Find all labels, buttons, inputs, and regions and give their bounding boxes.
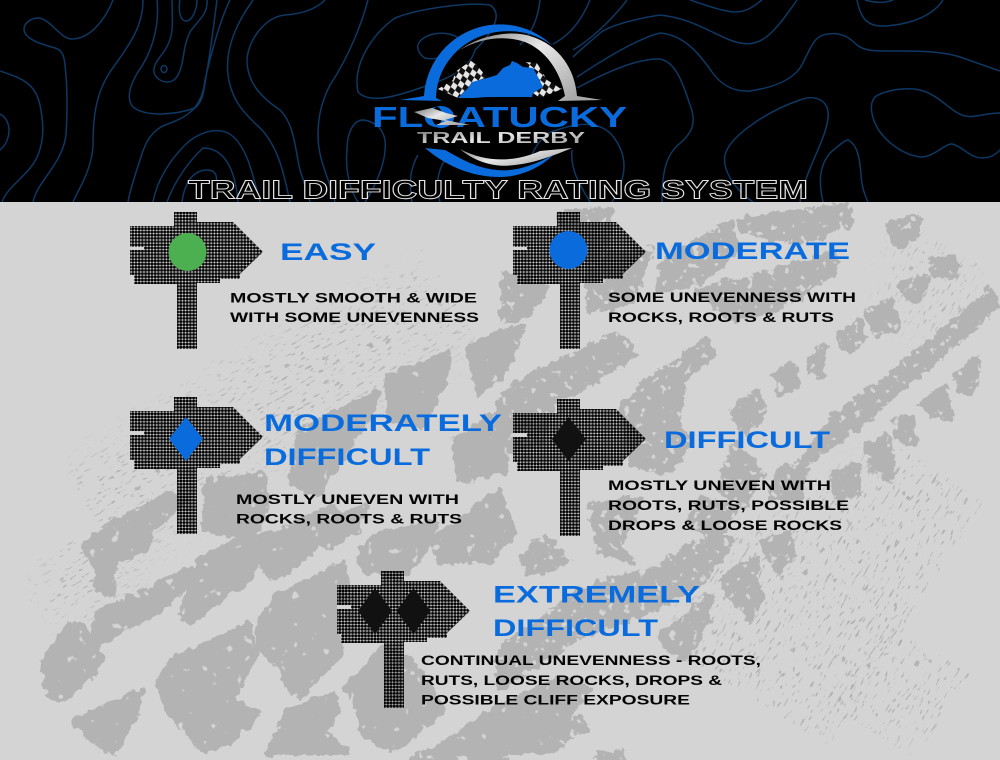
title: TRAIL DIFFICULTY RATING SYSTEM [188,174,808,204]
description: difficult: MOSTLY UNEVEN WITH [608,478,831,493]
heading: extremely difficult [493,582,700,642]
textured light grey background [0,202,1000,760]
description: moderately difficult: ROCKS, ROOTS & RUTS [236,512,462,526]
sign: blue diamond [130,397,263,534]
heading: moderately difficult: DIFFICULT [264,444,430,471]
sign: black diamond [513,399,646,536]
rating: moderately difficult [130,397,502,534]
description: easy: MOSTLY SMOOTH & WIDE [230,290,477,306]
float tube icon [414,106,470,128]
heading: extremely difficult: DIFFICULT [493,615,658,642]
description: moderate: ROCKS, ROOTS & RUTS [608,310,834,325]
heading: moderate: MODERATE [655,238,850,265]
description: moderate [608,290,856,325]
description: extremely difficult [421,653,761,708]
logo: Floatucky Trail Derby [372,24,627,177]
description: easy [230,290,479,325]
description: moderately difficult [236,492,462,526]
rating: easy [130,212,479,349]
description: extremely difficult: POSSIBLE CLIFF EXPOSURE [421,692,690,708]
description: difficult [608,478,849,533]
description: difficult: ROOTS, RUTS, POSSIBLE [608,498,849,513]
heading: moderately difficult: MODERATELY [264,410,502,437]
heading: difficult: DIFFICULT [664,427,830,454]
sign: blue circle [513,212,646,349]
heading: easy: EASY [280,239,376,266]
logo ring arcs [400,24,602,177]
rating: extremely difficult [337,571,761,708]
logo wordmark: FLOATUCKY [372,102,627,134]
logo subtitle: TRAIL DERBY [417,130,586,147]
description: moderate: SOME UNEVENNESS WITH [608,290,856,305]
sign: double black diamond [337,571,470,708]
rating: difficult [513,399,849,536]
description: extremely difficult: RUTS, LOOSE ROCKS, DROPS & [421,673,722,688]
sign: green circle [130,212,263,349]
description: easy: WITH SOME UNEVENNESS [230,310,479,325]
description: extremely difficult: CONTINUAL UNEVENNESS - ROOTS, [421,653,761,668]
heading: moderately difficult [264,410,502,471]
heading: extremely difficult: EXTREMELY [493,582,700,608]
rating: moderate [513,212,856,349]
description: moderately difficult: MOSTLY UNEVEN WITH [236,492,459,507]
description: difficult: DROPS & LOOSE ROCKS [608,518,842,533]
black topographic header panel [0,0,1000,202]
Kentucky state silhouette [458,61,543,98]
checkered flags [438,60,562,98]
